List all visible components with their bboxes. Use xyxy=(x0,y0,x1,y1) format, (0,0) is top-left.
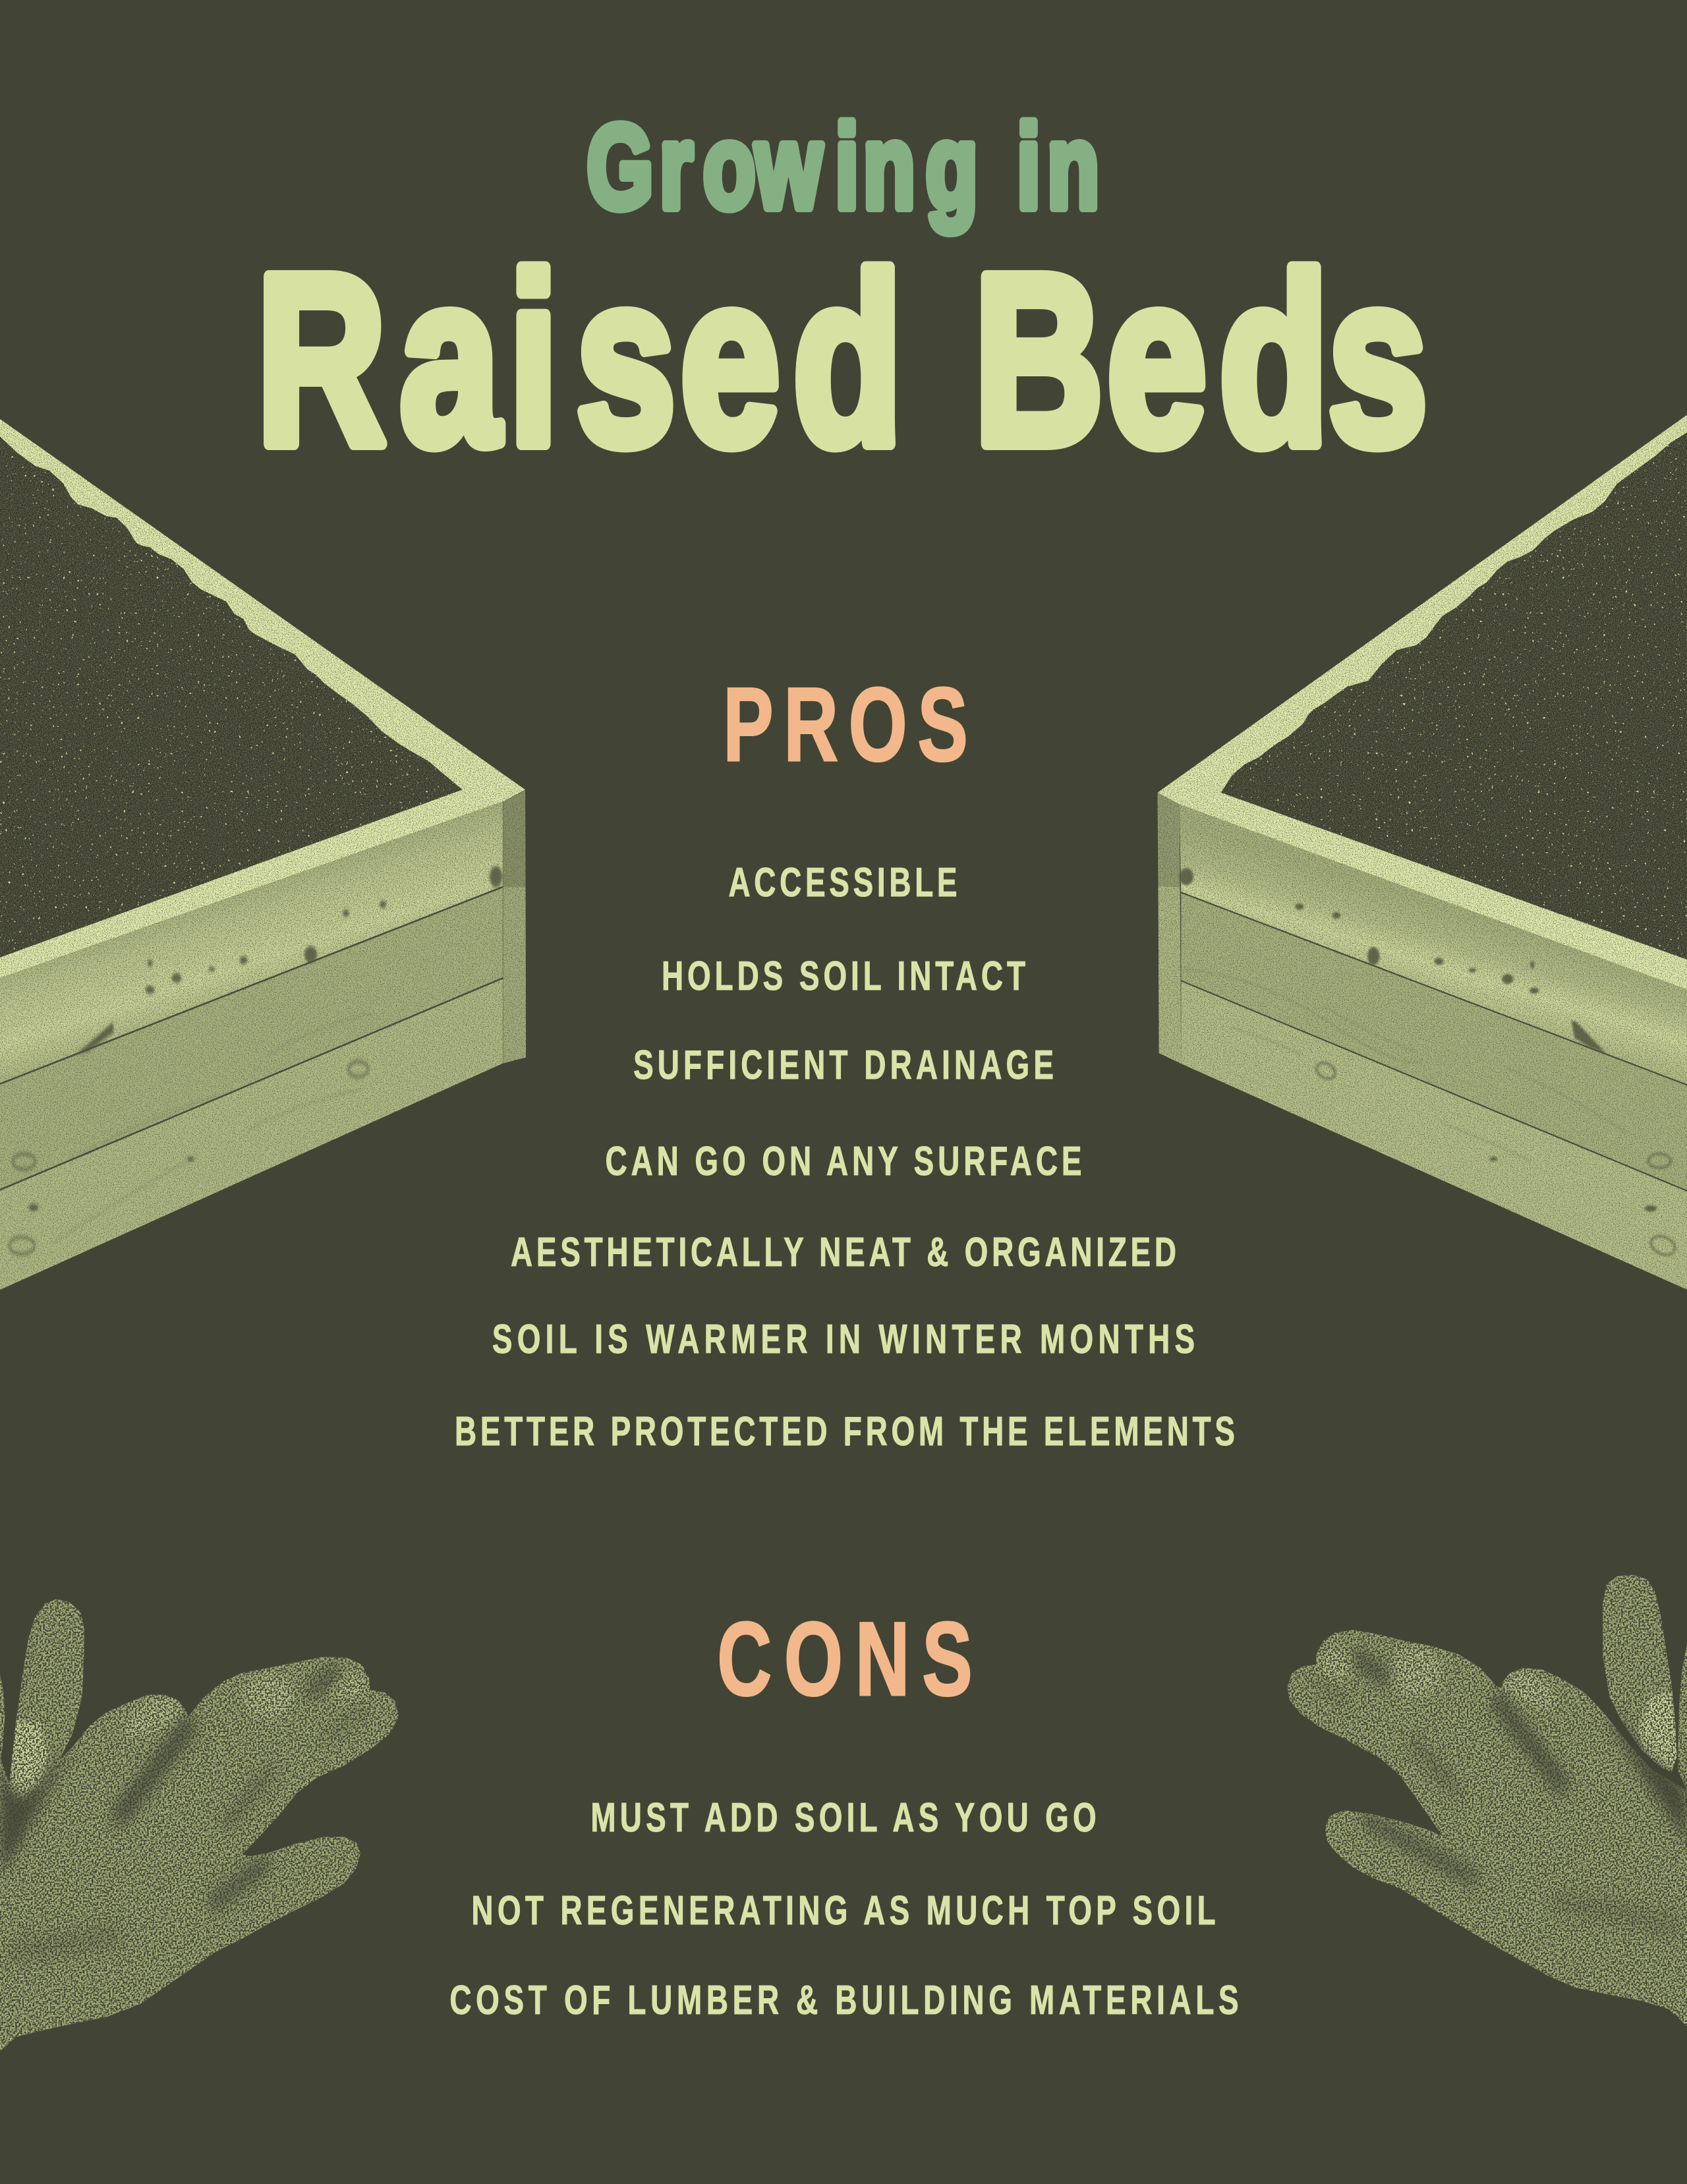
list: cons xyxy=(449,1795,1239,2023)
board seams xyxy=(0,801,503,1190)
bright glove patch xyxy=(1639,1693,1676,1772)
finger shadows xyxy=(1313,1659,1687,1925)
heading: PROS: PROS xyxy=(723,667,968,783)
glove highlights xyxy=(1318,1650,1560,1716)
list: cons: COST OF LUMBER & BUILDING MATERIALS xyxy=(449,1977,1239,2023)
title: Raised Beds: Raised Beds xyxy=(256,224,1427,495)
glove knit texture xyxy=(0,1582,409,2063)
soil xyxy=(0,428,468,962)
list: cons: NOT REGENERATING AS MUCH TOP SOIL xyxy=(471,1887,1216,1934)
corner post xyxy=(1157,793,1181,1064)
wood grain texture xyxy=(0,409,527,1292)
list: pros xyxy=(455,859,1235,1454)
title: Growing in: Growing in xyxy=(587,101,1099,233)
soil xyxy=(1219,428,1687,962)
bed rim xyxy=(0,419,525,978)
list: pros: HOLDS SOIL INTACT xyxy=(662,953,1025,999)
list: cons: MUST ADD SOIL AS YOU GO xyxy=(590,1795,1097,1841)
list: pros: SUFFICIENT DRAINAGE xyxy=(633,1042,1054,1088)
heading: CONS: CONS xyxy=(717,1601,973,1717)
list: pros: ACCESSIBLE xyxy=(728,859,958,905)
wood knots xyxy=(1180,868,1657,1212)
bed rim xyxy=(1157,415,1687,990)
middle board xyxy=(1181,892,1687,1191)
top board xyxy=(1180,804,1687,1085)
bright glove patch xyxy=(9,1720,47,1799)
board seams xyxy=(1181,892,1687,1191)
illustration: raised bed corner, left xyxy=(0,409,527,1292)
list: pros: BETTER PROTECTED FROM THE ELEMENTS xyxy=(455,1408,1235,1454)
glove highlights xyxy=(121,1669,364,1744)
wood knots xyxy=(28,866,502,1211)
bottom board xyxy=(0,978,503,1290)
wood grain texture xyxy=(1153,409,1687,1292)
list: pros: CAN GO ON ANY SURFACE xyxy=(606,1138,1081,1184)
illustration: gloved hand, right xyxy=(1278,1568,1687,2050)
list: pros: AESTHETICALLY NEAT & ORGANIZED xyxy=(511,1229,1176,1275)
wood grain lines xyxy=(54,1089,359,1243)
top board xyxy=(0,801,503,1084)
illustration: gloved hand, left xyxy=(0,1582,409,2063)
glove knit texture xyxy=(1278,1568,1687,2050)
illustration: raised bed corner, right xyxy=(1153,409,1687,1292)
finger shadows xyxy=(0,1646,363,1952)
corner post xyxy=(503,790,526,1063)
middle board xyxy=(0,887,503,1190)
wood grain lines xyxy=(1183,969,1628,1161)
bottom board xyxy=(1181,981,1687,1290)
list: pros: SOIL IS WARMER IN WINTER MONTHS xyxy=(492,1316,1195,1362)
